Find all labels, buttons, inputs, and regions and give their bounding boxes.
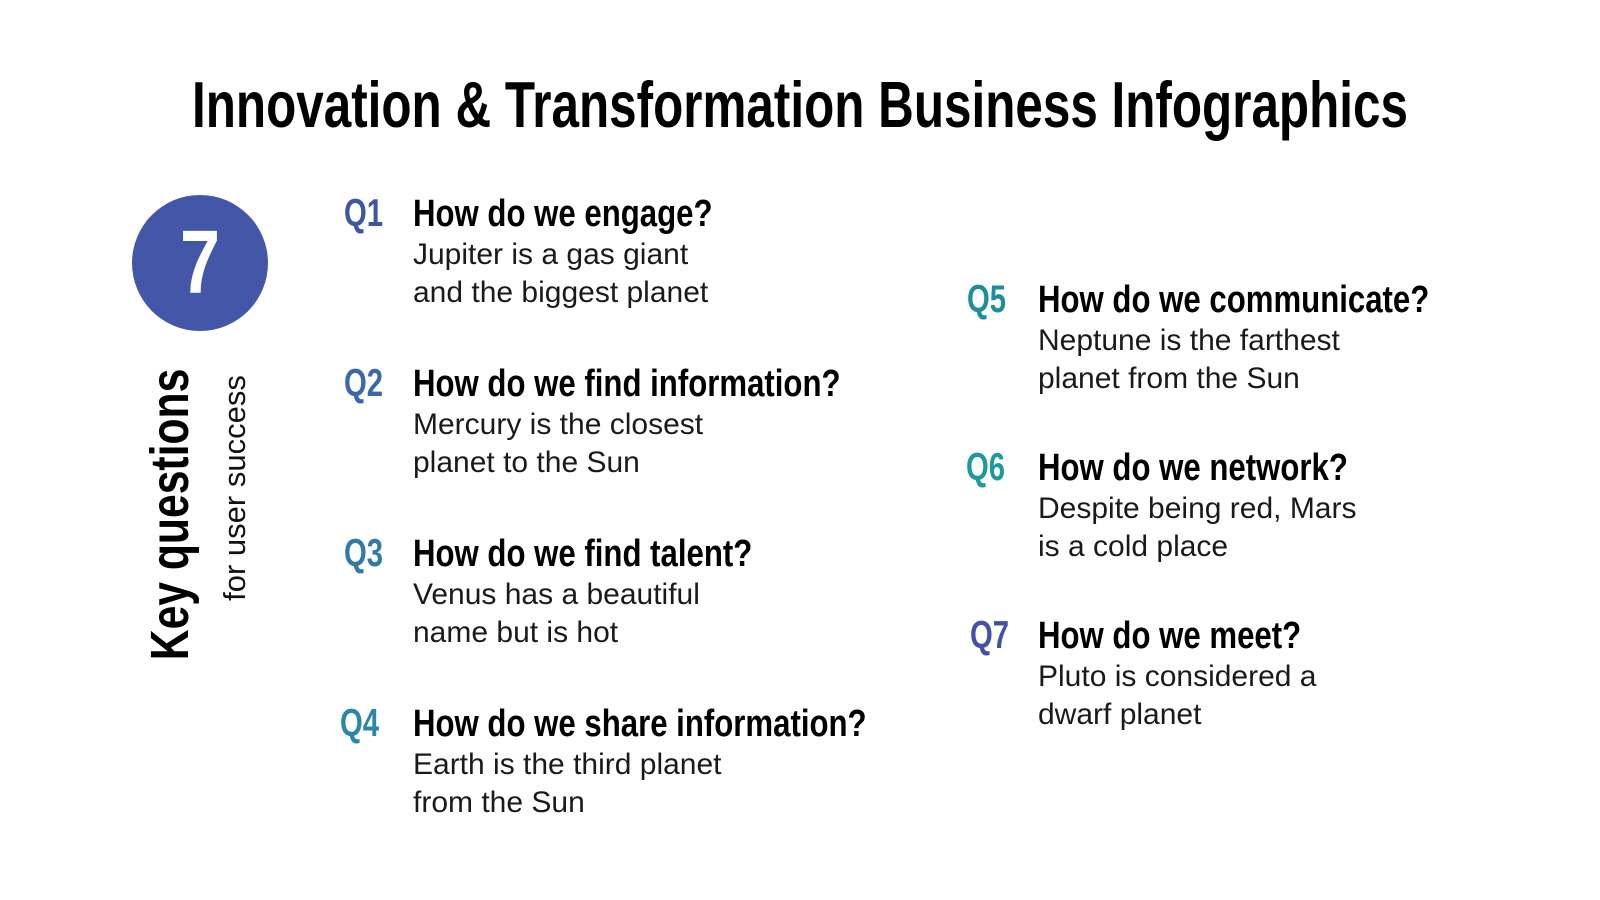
question Q7: How do we meet? [1038,615,1301,657]
question Q5: planet from the Sun [1038,362,1300,395]
badge: number 7 circle [132,195,268,331]
question Q2: Mercury is the closest [413,408,703,441]
question Q6: is a cold place [1038,530,1228,563]
question Q4: from the Sun [413,786,585,819]
question Q2: Q2 [344,362,383,405]
question Q1: How do we engage? [413,193,713,235]
question Q6 [966,446,1356,563]
question Q6: Q6 [966,446,1005,489]
text: Key questions [140,369,200,660]
question Q2: planet to the Sun [413,446,640,479]
question Q4 [340,702,867,819]
question Q3 [344,532,752,649]
question Q6: Despite being red, Mars [1038,492,1356,525]
question Q3: How do we find talent? [413,533,752,575]
question Q2 [344,362,841,479]
question Q2: How do we find information? [413,363,841,405]
badge: number 7 circle: 7 [180,213,220,313]
vertical subheading: for user success: for user success [217,375,252,601]
question Q1 [344,192,713,309]
question Q3: Venus has a beautiful [413,578,700,611]
question Q7: Q7 [970,614,1009,657]
question Q7 [970,614,1316,731]
question Q7: Pluto is considered a [1038,660,1316,693]
question Q4: Earth is the third planet [413,748,722,781]
question Q1: Q1 [344,192,383,235]
question Q1: and the biggest planet [413,276,708,309]
question Q1: Jupiter is a gas giant [413,238,688,271]
title: Innovation & Transformation Business Infographics [192,68,1408,141]
question Q4: How do we share information? [413,703,867,745]
question Q5: Neptune is the farthest [1038,324,1340,357]
question Q3: Q3 [344,532,383,575]
question Q5 [967,278,1429,395]
question Q5: How do we communicate? [1038,279,1429,321]
question Q7: dwarf planet [1038,698,1201,731]
question Q6: How do we network? [1038,447,1348,489]
question Q3: name but is hot [413,616,618,649]
question Q4: Q4 [340,702,379,745]
question Q5: Q5 [967,278,1006,321]
